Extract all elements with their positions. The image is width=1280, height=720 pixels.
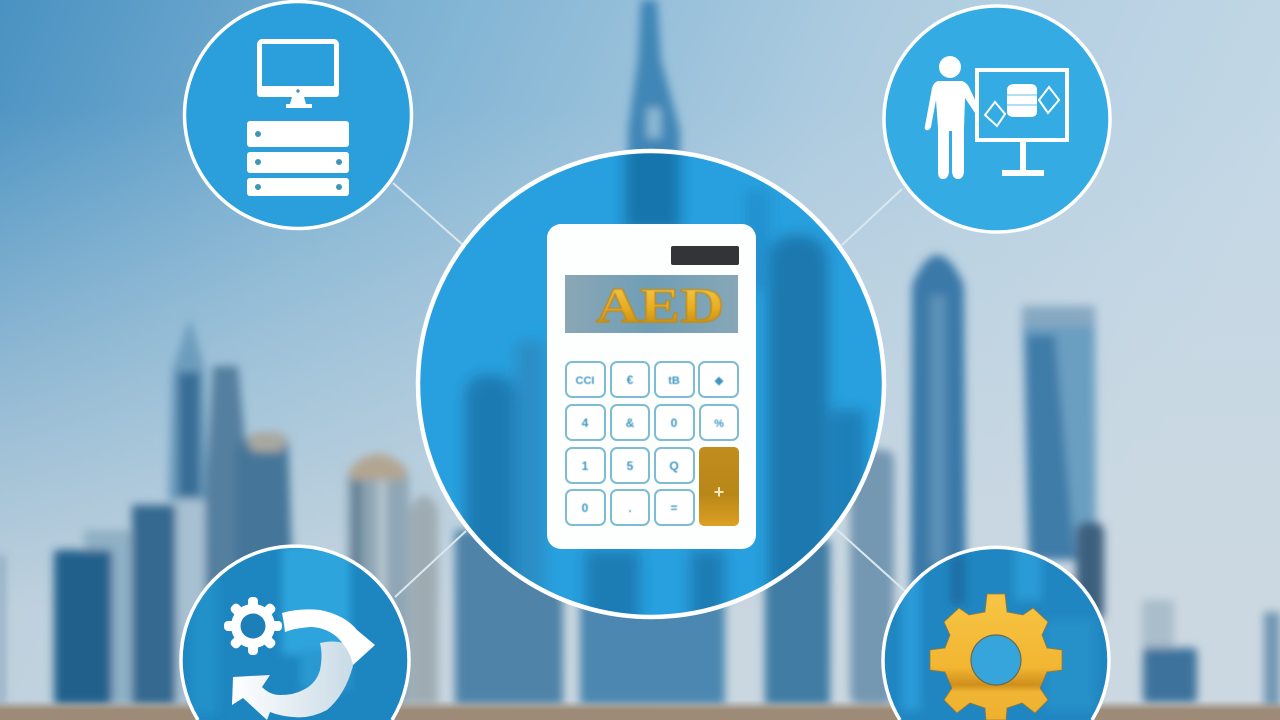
keypad: 0 [582, 501, 589, 515]
central tower spire [628, 0, 680, 240]
central circle with calculator [418, 140, 884, 630]
keypad: 1 [582, 459, 589, 473]
keypad: CCI [576, 375, 594, 387]
keypad: . [628, 501, 632, 515]
keypad: & [626, 416, 635, 430]
solar panel [671, 246, 739, 265]
background: sandy ground strip [0, 700, 1280, 720]
circle icon: gold gear [883, 545, 1109, 720]
presentation board [977, 70, 1067, 176]
central circle: blurred towers seen through [465, 140, 865, 630]
presenter figure [925, 56, 978, 179]
keypad: = [670, 501, 678, 515]
tall right towers [910, 255, 967, 705]
keypad: ◆ [714, 375, 724, 387]
connector line: top right [842, 189, 902, 245]
left tower group [168, 318, 208, 500]
keypad: 0 [671, 416, 678, 430]
server stack [247, 121, 349, 196]
circle icon: gear with cycle arrows [181, 545, 409, 720]
connector line: top left [393, 183, 463, 245]
small white gear [224, 597, 282, 655]
keypad: € [627, 373, 634, 387]
keypad: 4 [582, 416, 589, 430]
mid left towers [347, 455, 409, 705]
circle icon: monitor and servers [184, 2, 412, 228]
keypad: tB [668, 375, 680, 387]
keypad: 5 [627, 459, 634, 473]
display with AED: AED [596, 277, 724, 333]
gold plus key [699, 447, 739, 526]
lower city behind main circle [455, 530, 563, 705]
keypad [566, 362, 738, 525]
gold gear shape [930, 594, 1062, 720]
display with AED [565, 275, 738, 333]
calculator [547, 224, 756, 549]
curved cycle arrows [232, 609, 375, 720]
far right towers [1142, 600, 1174, 660]
gold plus key: + [714, 482, 724, 502]
calculator body [547, 224, 756, 549]
connector line: bottom left [395, 531, 466, 597]
monitor [257, 42, 339, 108]
connector line: bottom right [836, 529, 905, 591]
keypad: Q [669, 459, 679, 473]
circle icon: presenter with board [884, 6, 1110, 232]
keypad: % [714, 418, 724, 430]
